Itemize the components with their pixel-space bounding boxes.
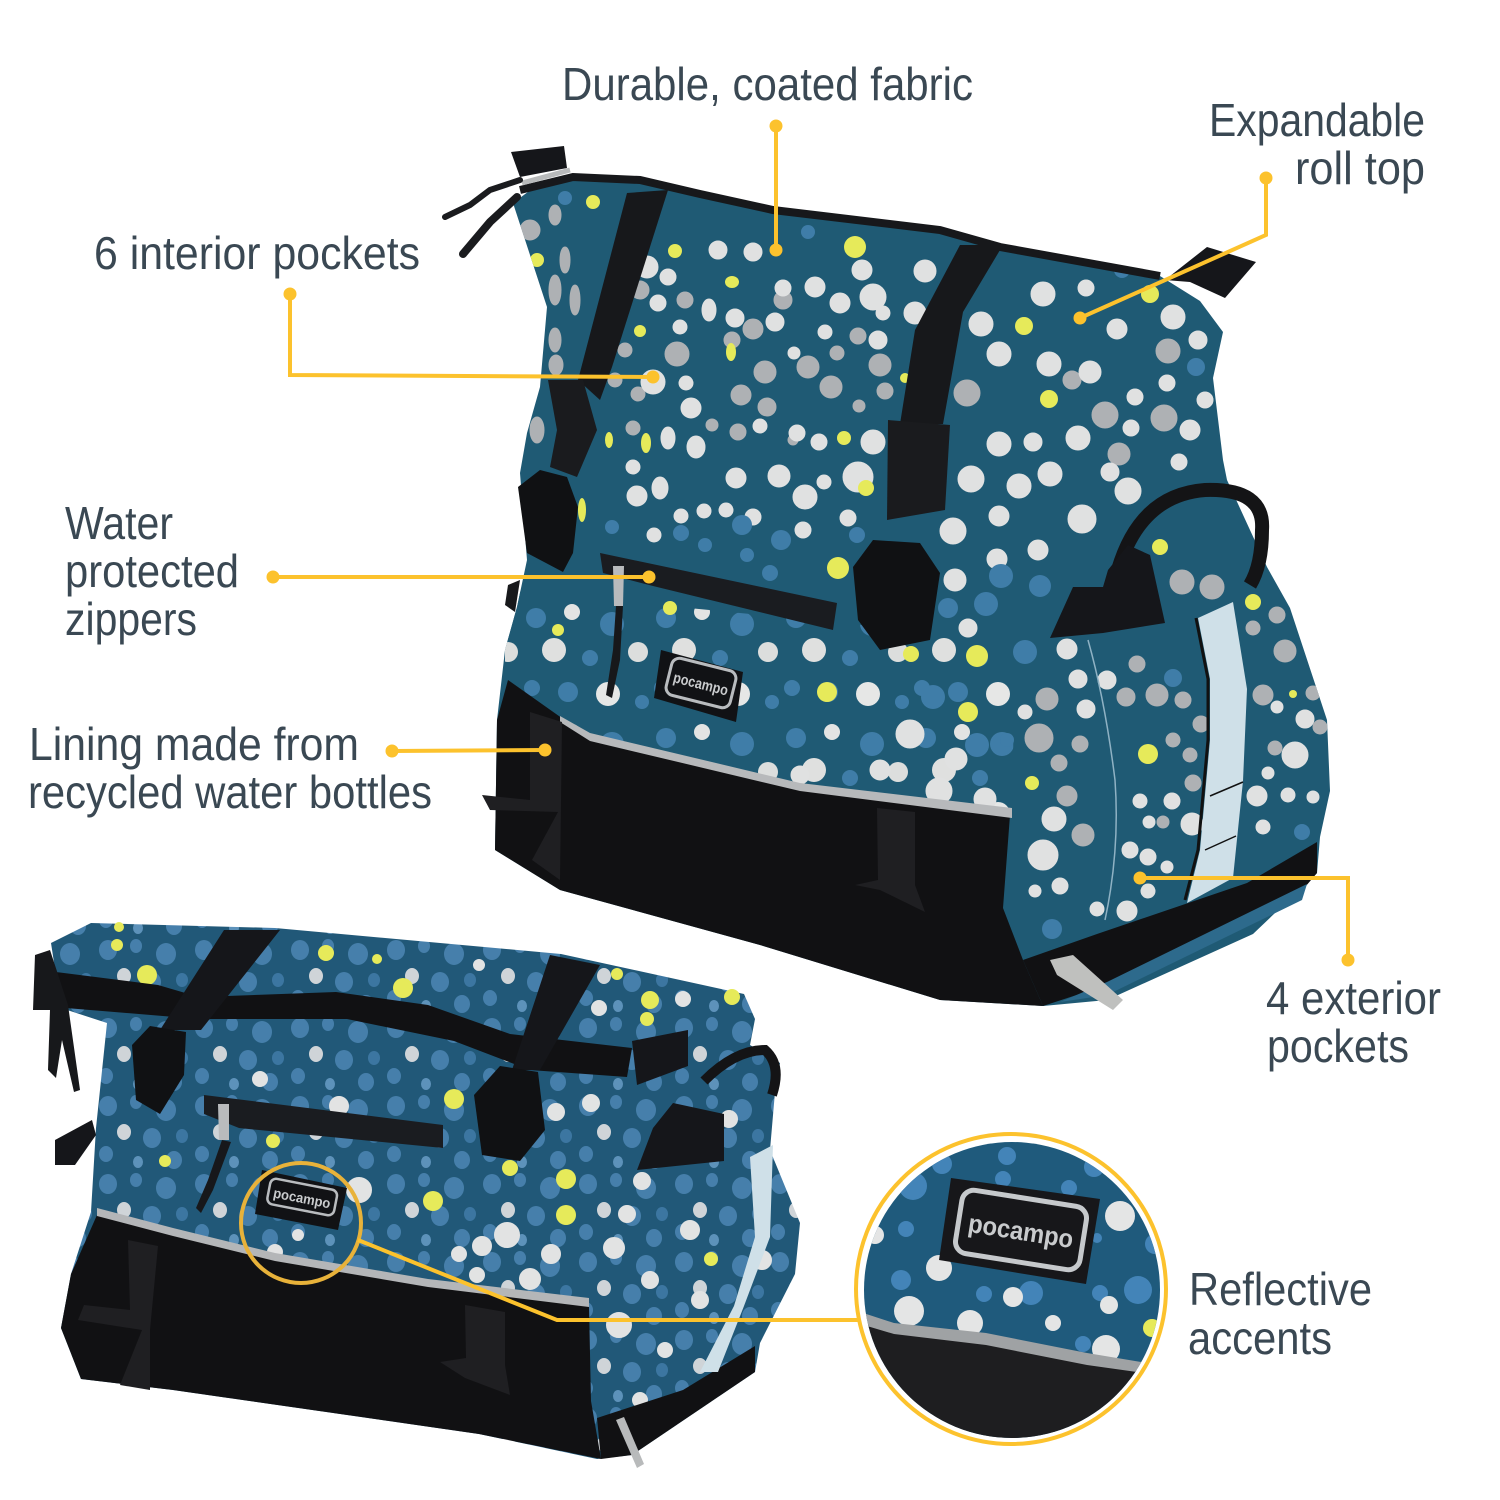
lower side handle	[637, 1103, 724, 1170]
durable fabric label: Durable, coated fabric	[562, 58, 973, 110]
inset detail circle	[856, 1134, 1166, 1444]
handle base	[1050, 545, 1165, 638]
lining label: recycled water bottles	[28, 766, 432, 818]
right buckle	[853, 540, 940, 650]
lower logo patch: pocampo	[272, 1185, 332, 1211]
zipper ring	[522, 170, 570, 183]
upper bag top edge binding	[520, 177, 1160, 276]
inset yellow dot	[1143, 1319, 1157, 1337]
lower zipper pull	[616, 1417, 644, 1468]
expandable label: Expandable	[1209, 94, 1425, 146]
lower roll band tab	[632, 1030, 688, 1085]
reflective label: Reflective	[1189, 1263, 1372, 1315]
zipper tab	[606, 566, 624, 698]
lining leader	[386, 744, 551, 757]
lower bag product image	[33, 922, 800, 1468]
logo patch	[654, 650, 743, 722]
left buckle	[518, 470, 578, 572]
lower left strap	[160, 930, 280, 1030]
lower bag white dots	[253, 960, 771, 1407]
exterior pockets leader	[1134, 872, 1354, 966]
callout: exterior pockets	[1134, 872, 1441, 1072]
lower zipper tab	[196, 1104, 231, 1213]
zipper pull	[1050, 955, 1123, 1010]
reflective label: accents	[1188, 1312, 1332, 1364]
callout: water protected zippers	[65, 497, 655, 645]
lower base webbing	[78, 1240, 510, 1395]
left strap	[578, 190, 668, 400]
lower bag reflective trim	[97, 1208, 589, 1307]
zipper tab top left	[511, 146, 567, 177]
right strap keeper	[887, 420, 950, 520]
zippers label: zippers	[65, 593, 197, 645]
callout: recycled lining	[28, 718, 551, 818]
upper bag grey dots	[521, 206, 1326, 845]
interior pockets label: 6 interior pockets	[94, 227, 420, 279]
callout: interior pockets	[94, 227, 659, 383]
expandable label: roll top	[1295, 142, 1425, 194]
base webbing	[482, 712, 925, 912]
lower logo patch	[255, 1170, 347, 1230]
zipper cord two	[463, 197, 517, 254]
upper bag pocket trim	[1060, 884, 1307, 1002]
lower bag body	[51, 923, 800, 1459]
callout: expandable roll top	[1074, 94, 1425, 324]
zippers label: Water	[65, 497, 173, 549]
top right tab	[1165, 247, 1256, 298]
lower right strap	[512, 955, 600, 1070]
upper bag bottom pocket band	[1023, 842, 1317, 1006]
inset close-up	[860, 1140, 1165, 1440]
inset logo patch	[939, 1178, 1100, 1284]
callout: durable fabric	[562, 58, 973, 256]
expandable leader	[1074, 172, 1272, 324]
reflective leader	[358, 1240, 858, 1320]
left strap keeper	[548, 380, 597, 477]
exterior pockets label: 4 exterior	[1266, 972, 1441, 1024]
right strap	[900, 245, 1003, 424]
interior pockets leader	[284, 288, 659, 383]
zippers label: protected	[65, 545, 239, 597]
lower bag yellow dots	[111, 922, 740, 1266]
inset blue dots	[891, 1147, 1165, 1352]
upper bag product image	[445, 146, 1330, 1010]
exterior pockets label: pockets	[1267, 1020, 1409, 1072]
lower handle loop	[704, 1050, 776, 1095]
inset logo patch: pocampo	[966, 1208, 1076, 1254]
upper bag blue dots	[558, 191, 1310, 939]
upper bag black base	[495, 680, 1043, 1006]
left side tab	[55, 1120, 96, 1165]
inset outer ring	[856, 1134, 1166, 1444]
side handle loop	[1118, 490, 1262, 585]
lower left buckle	[132, 1026, 186, 1114]
left zipper pulls	[33, 950, 80, 1092]
small highlight circle on logo	[241, 1163, 361, 1283]
upper bag reflective trim	[560, 716, 1012, 818]
durable fabric leader	[770, 120, 782, 256]
callout: reflective accents	[358, 1240, 1372, 1364]
zippers leader	[267, 571, 655, 583]
upper bag body	[495, 175, 1330, 1006]
left side strap tab	[505, 580, 520, 612]
lower front zipper	[204, 1095, 443, 1148]
side pocket edge	[1088, 640, 1116, 920]
upper bag white dots	[627, 242, 1318, 920]
lower bag black base	[61, 1215, 601, 1459]
zipper cord one	[445, 180, 520, 217]
upper bag yellow dots	[530, 195, 1297, 790]
inset black base	[868, 1324, 1136, 1438]
lining label: Lining made from	[29, 718, 359, 770]
reflective strip	[1185, 602, 1247, 903]
inset white dots	[866, 1201, 1135, 1363]
upper bag lower front fabric	[505, 590, 1015, 820]
lower reflective strip	[700, 1145, 773, 1372]
logo patch: pocampo	[671, 669, 730, 699]
lower right buckle	[474, 1066, 545, 1161]
lower bag roll band	[56, 972, 632, 1077]
front zipper	[600, 553, 837, 630]
inset reflective trim	[866, 1314, 1142, 1372]
lower bag bottom pocket	[597, 1346, 755, 1459]
